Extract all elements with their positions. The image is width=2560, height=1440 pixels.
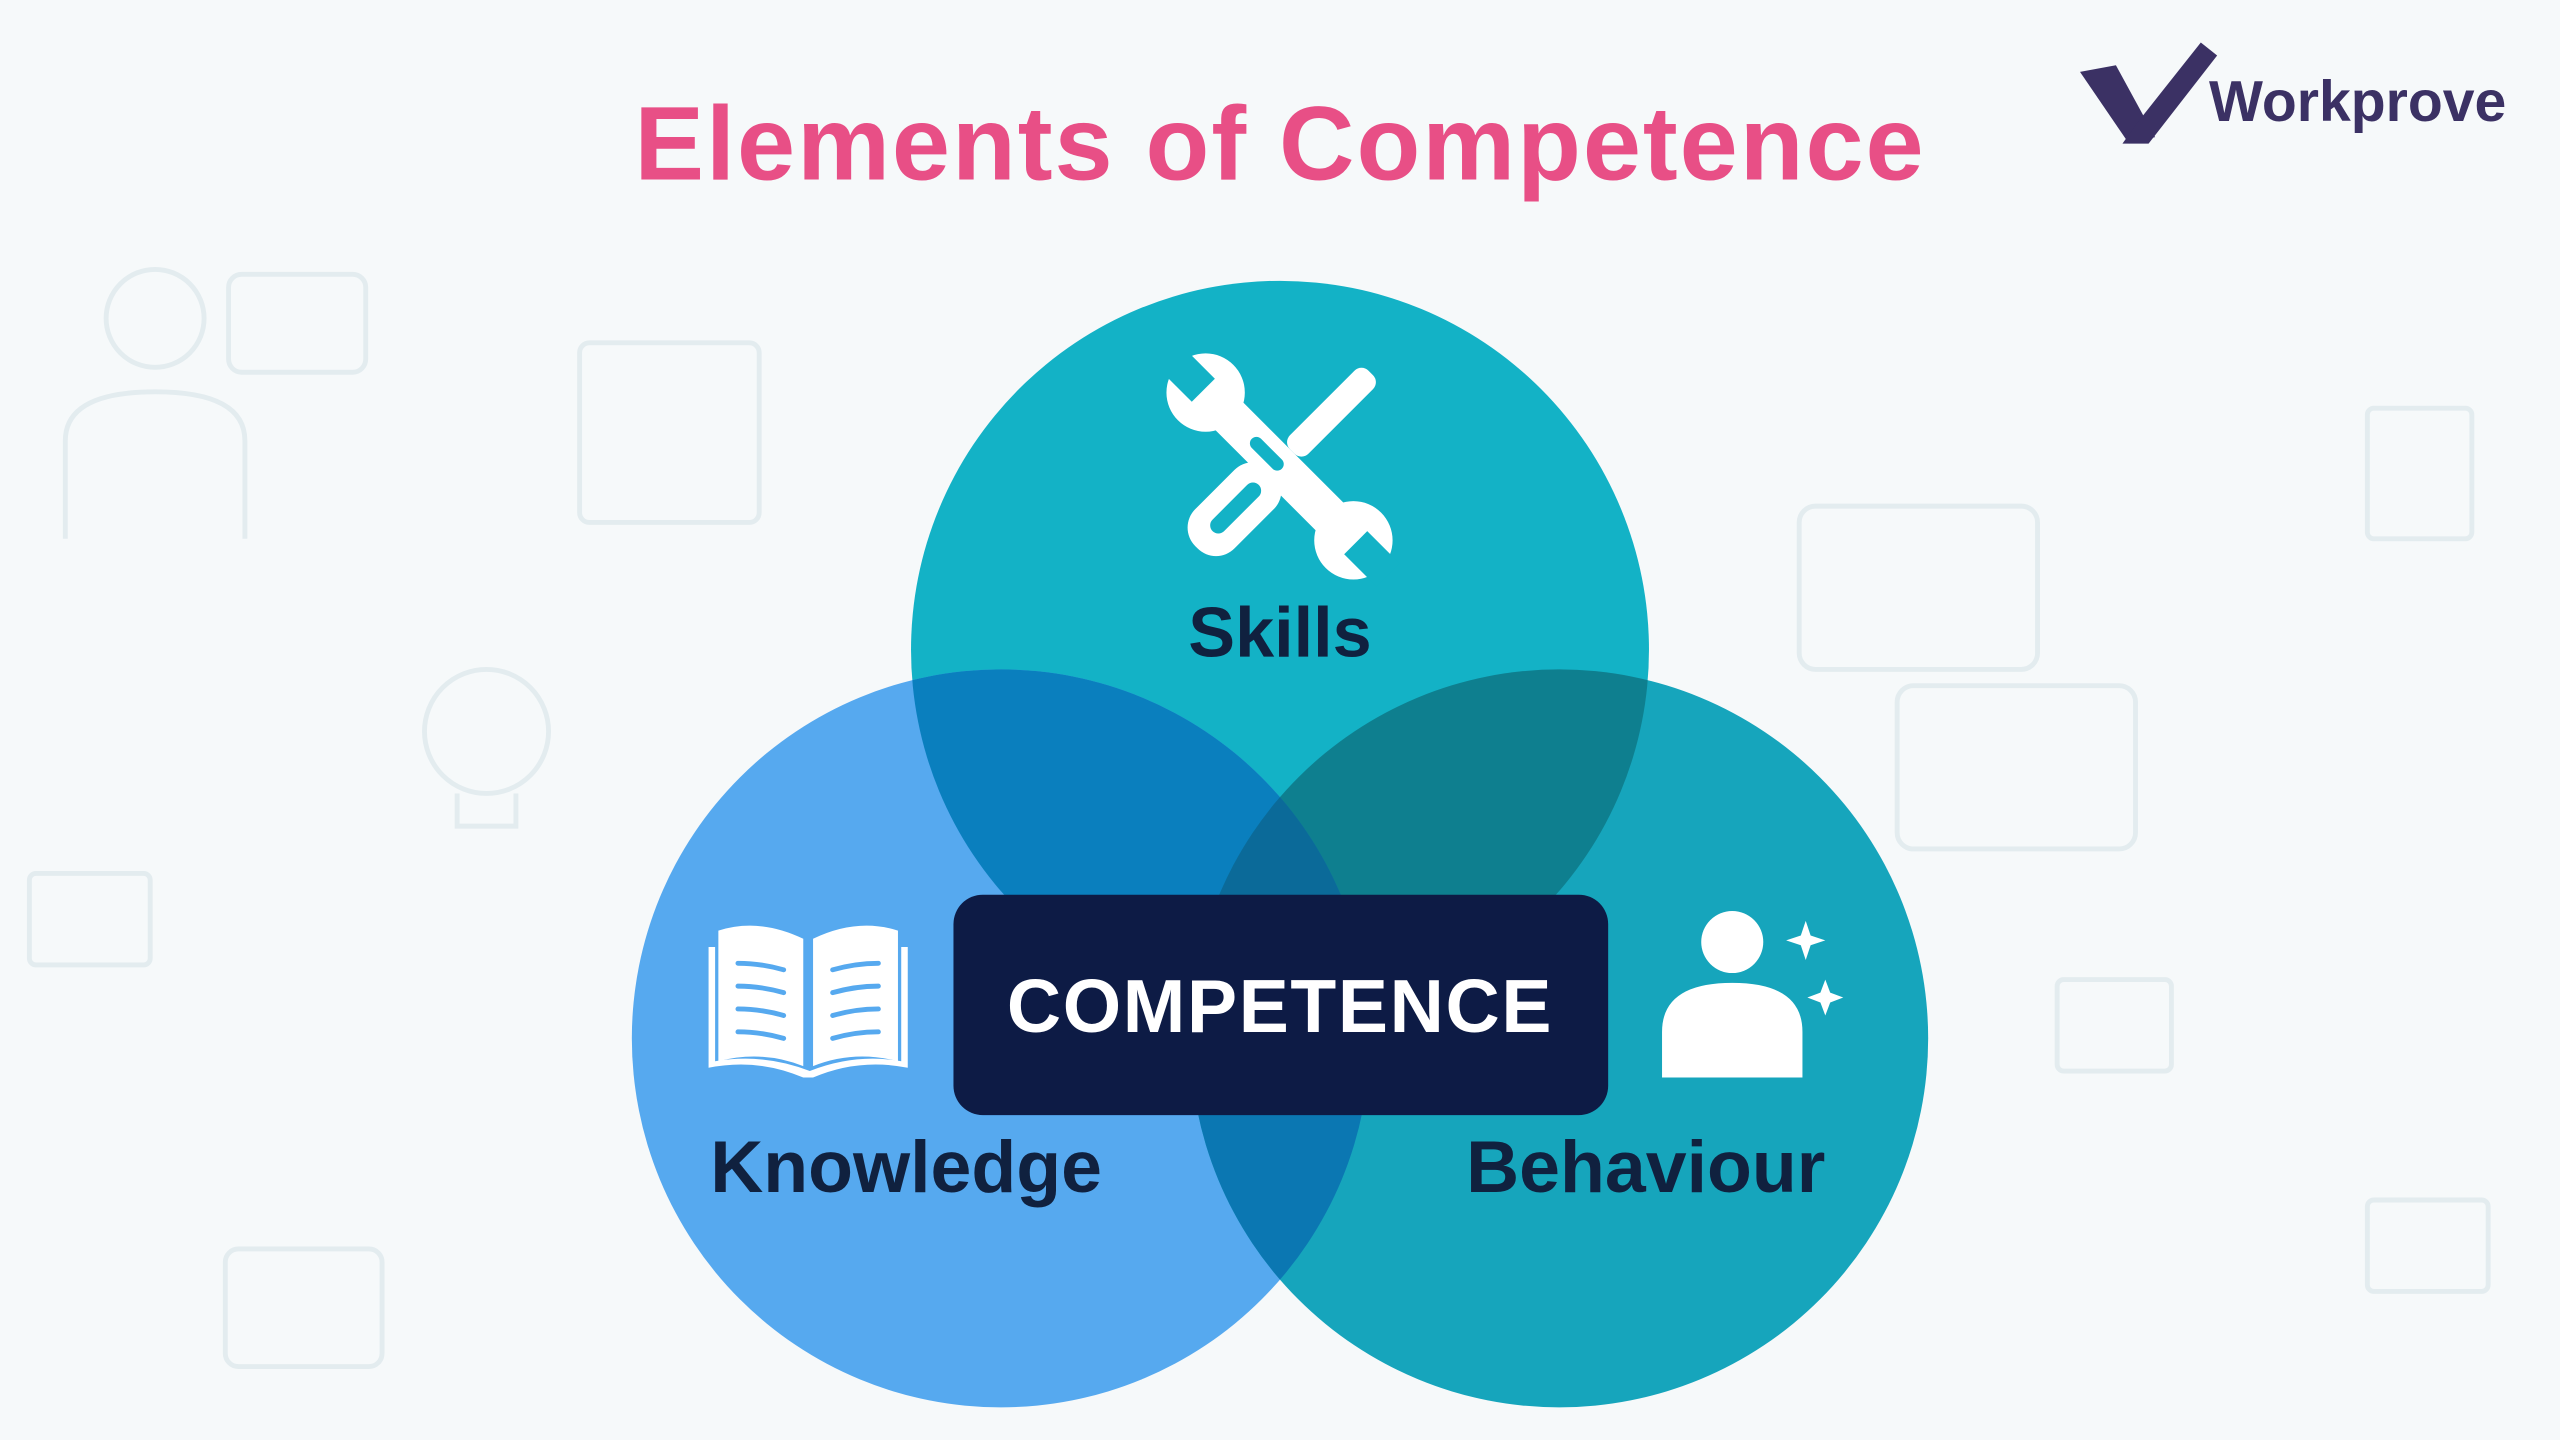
- circle: skills: [911, 281, 1649, 1019]
- competence box: [953, 895, 1608, 1115]
- logo: Workprove: [2080, 42, 2506, 144]
- overlap: center: [1220, 798, 1340, 895]
- icon: book: [709, 926, 908, 1078]
- label: skills: Skills: [1188, 592, 1372, 671]
- competence box: COMPETENCE: [1007, 964, 1553, 1048]
- overlap: knowledge-behaviour: [1198, 800, 1362, 1280]
- logo: Workprove: Workprove: [2209, 70, 2506, 134]
- label: behaviour: Behaviour: [1466, 1125, 1825, 1208]
- background icons: [29, 269, 2488, 1367]
- icon: tools: [1143, 330, 1416, 603]
- circle: knowledge: [632, 669, 1370, 1407]
- venn diagram: [632, 281, 1928, 1407]
- circle: behaviour: [1190, 669, 1928, 1407]
- label: knowledge: Knowledge: [710, 1125, 1102, 1208]
- overlap: skills-knowledge: [912, 669, 1280, 895]
- overlap: skills-behaviour: [1280, 669, 1648, 895]
- icon: person: [1662, 911, 1843, 1078]
- title: Elements of Competence: [634, 86, 1926, 203]
